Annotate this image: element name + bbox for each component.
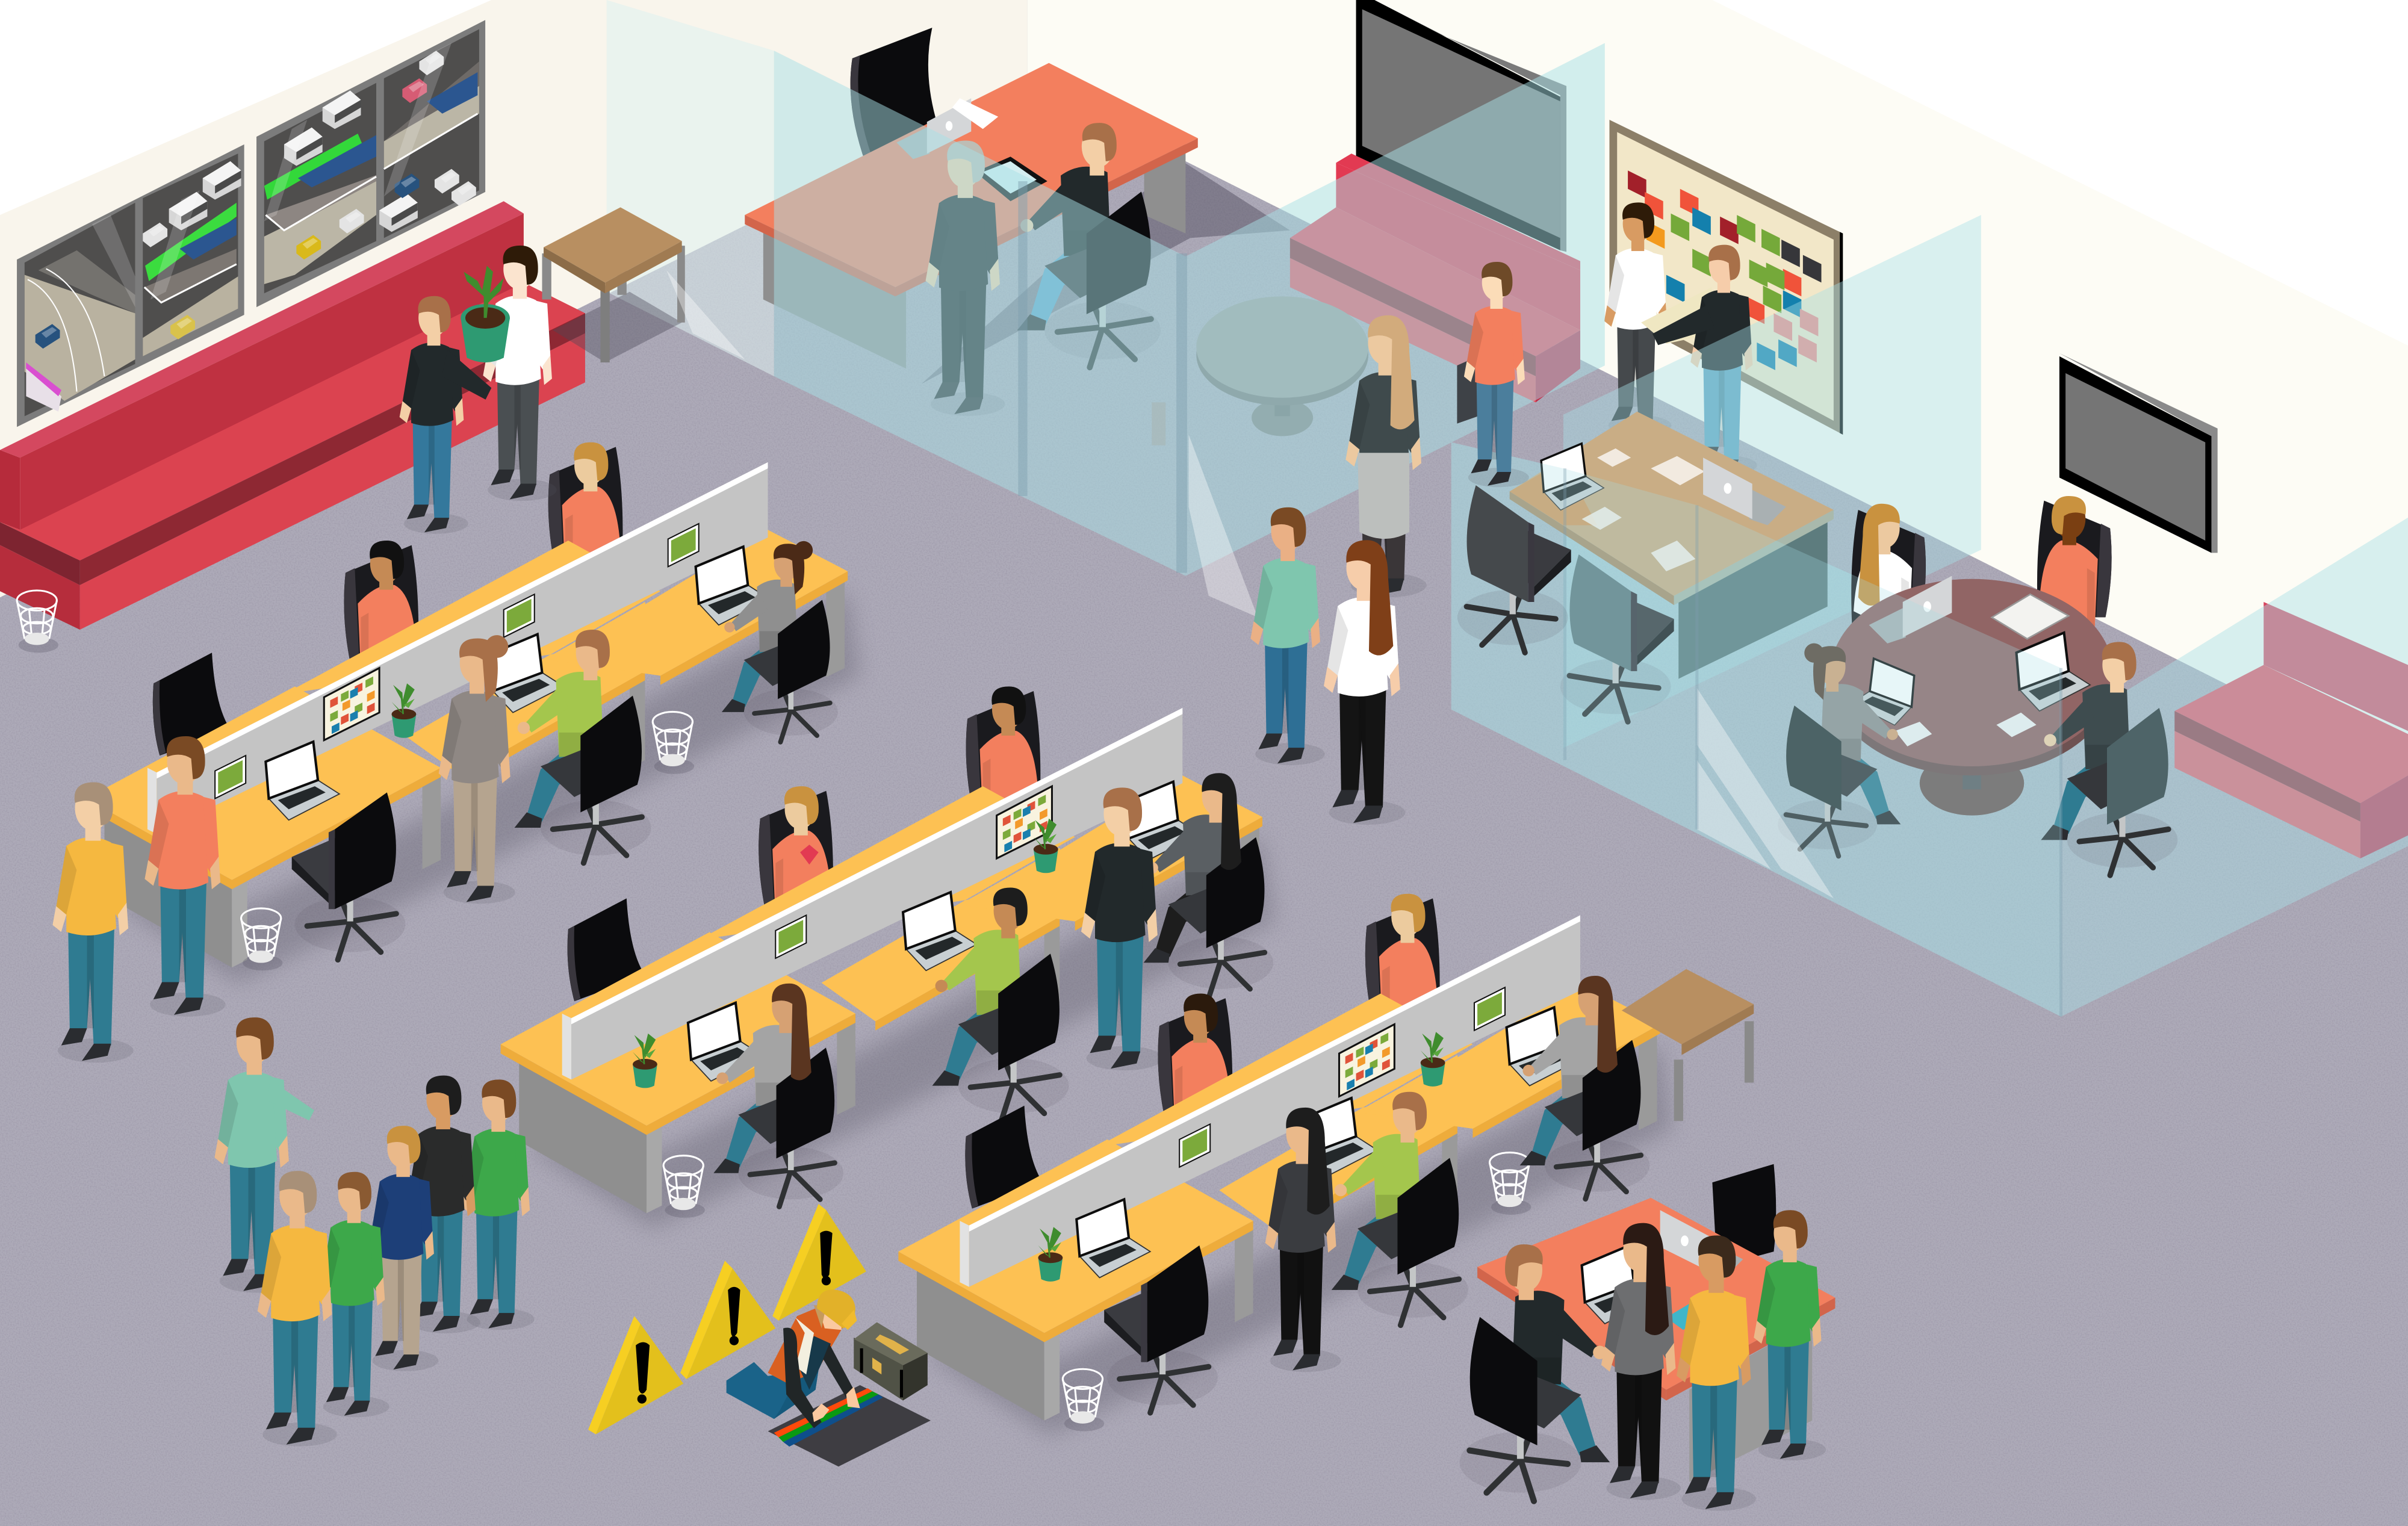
person: man in orange with tablet [1457, 262, 1529, 487]
door handle [1152, 402, 1165, 445]
right sofa [2174, 602, 2408, 858]
rectangular meeting table [1510, 412, 1834, 679]
person: striped woman seated [1144, 773, 1273, 996]
glass: faint left panel [607, 0, 774, 376]
person: man in lime shirt seated [515, 630, 651, 863]
person: woman in grey at table [1601, 1223, 1681, 1500]
second wall monitor [2059, 353, 2218, 553]
seated manager [1017, 123, 1161, 367]
person: woman with bun at round table [1778, 644, 1901, 856]
open floor cable channel [768, 1385, 931, 1466]
person: woman with long hair seated [713, 984, 843, 1206]
side table [542, 207, 685, 362]
desk row two [501, 686, 1274, 1229]
walls [0, 0, 2408, 775]
monitor on back wall [1356, 0, 1566, 252]
glass: door seams [1018, 181, 1187, 573]
person: man in orange shirt [144, 736, 226, 1017]
person: woman with long hair seated [1520, 976, 1649, 1199]
person: man in dark sweater at board [1641, 245, 1757, 475]
kanban board [1609, 120, 1843, 435]
person: blonde woman in skirt [1345, 315, 1427, 597]
glass: side panel near entrance [1185, 43, 1605, 576]
person: man in orange at round table [2037, 496, 2112, 630]
person: woman in taupe standing [439, 635, 515, 904]
red sofa [0, 201, 585, 630]
glass: manager office front [774, 51, 1185, 576]
group of people: teal shirt man [214, 1017, 314, 1292]
group of people: woman in blue blazer [368, 1126, 438, 1371]
person: man in lime shirt seated [932, 888, 1069, 1121]
person: green shirt man at table [1754, 1210, 1826, 1460]
person: consultant standing at desk [926, 140, 1005, 416]
repair worker kneeling [727, 1289, 860, 1428]
person: woman in striped top standing [1265, 1108, 1341, 1372]
glass: reflections [666, 270, 1834, 898]
warning sign three [772, 1204, 866, 1321]
glass: panel behind meeting room [1563, 215, 1981, 748]
person: man in lime shirt seated [1332, 1092, 1468, 1326]
person: seated man at table [1459, 1244, 1610, 1501]
toolbox [854, 1322, 928, 1401]
group of people: green shirt man [462, 1079, 535, 1330]
person: yellow shirt man at table [1677, 1235, 1756, 1511]
desk row three [898, 894, 1672, 1436]
group of people: grey haired man in yellow [258, 1171, 337, 1447]
person: man in white shirt at board [1604, 202, 1671, 435]
side table in row three [1622, 969, 1754, 1121]
person: man with grey hair in yellow shirt [52, 783, 134, 1062]
person: man in dark sweater holding plant [400, 296, 491, 534]
person: man in dark sweater standing [1081, 787, 1162, 1070]
round meeting table [1831, 576, 2113, 816]
sofa behind glass [1290, 154, 1580, 402]
wastebasket by sofa [17, 591, 58, 653]
group of people: dark shirt man [406, 1076, 480, 1333]
wall screens: traffic monitoring [17, 20, 485, 427]
round coffee table [1196, 296, 1368, 436]
person: man in teal shirt [1250, 507, 1325, 765]
person: woman in white at round table [1851, 504, 1926, 639]
corner desk [745, 28, 1290, 384]
glass: seam lines [1563, 468, 2062, 1017]
desk row one [86, 442, 860, 983]
group of people: green shirt man front [318, 1172, 389, 1417]
warning sign two [680, 1261, 775, 1379]
person: man in white holding plant [483, 246, 557, 501]
meeting chair in teal tint [1560, 554, 1674, 722]
icon: potted plant [461, 265, 510, 362]
person: man at round table [2041, 642, 2177, 875]
person: woman with bun seated [722, 541, 838, 742]
collaborative table [1477, 1164, 1835, 1482]
glass: meeting room floor tint [1451, 442, 2061, 1017]
warning sign one [588, 1316, 683, 1435]
person: woman in white blouse [1324, 540, 1405, 825]
meeting chair [1457, 485, 1571, 653]
glass: meeting room front [1451, 442, 2061, 1017]
glass: right panel [2061, 518, 2408, 1017]
